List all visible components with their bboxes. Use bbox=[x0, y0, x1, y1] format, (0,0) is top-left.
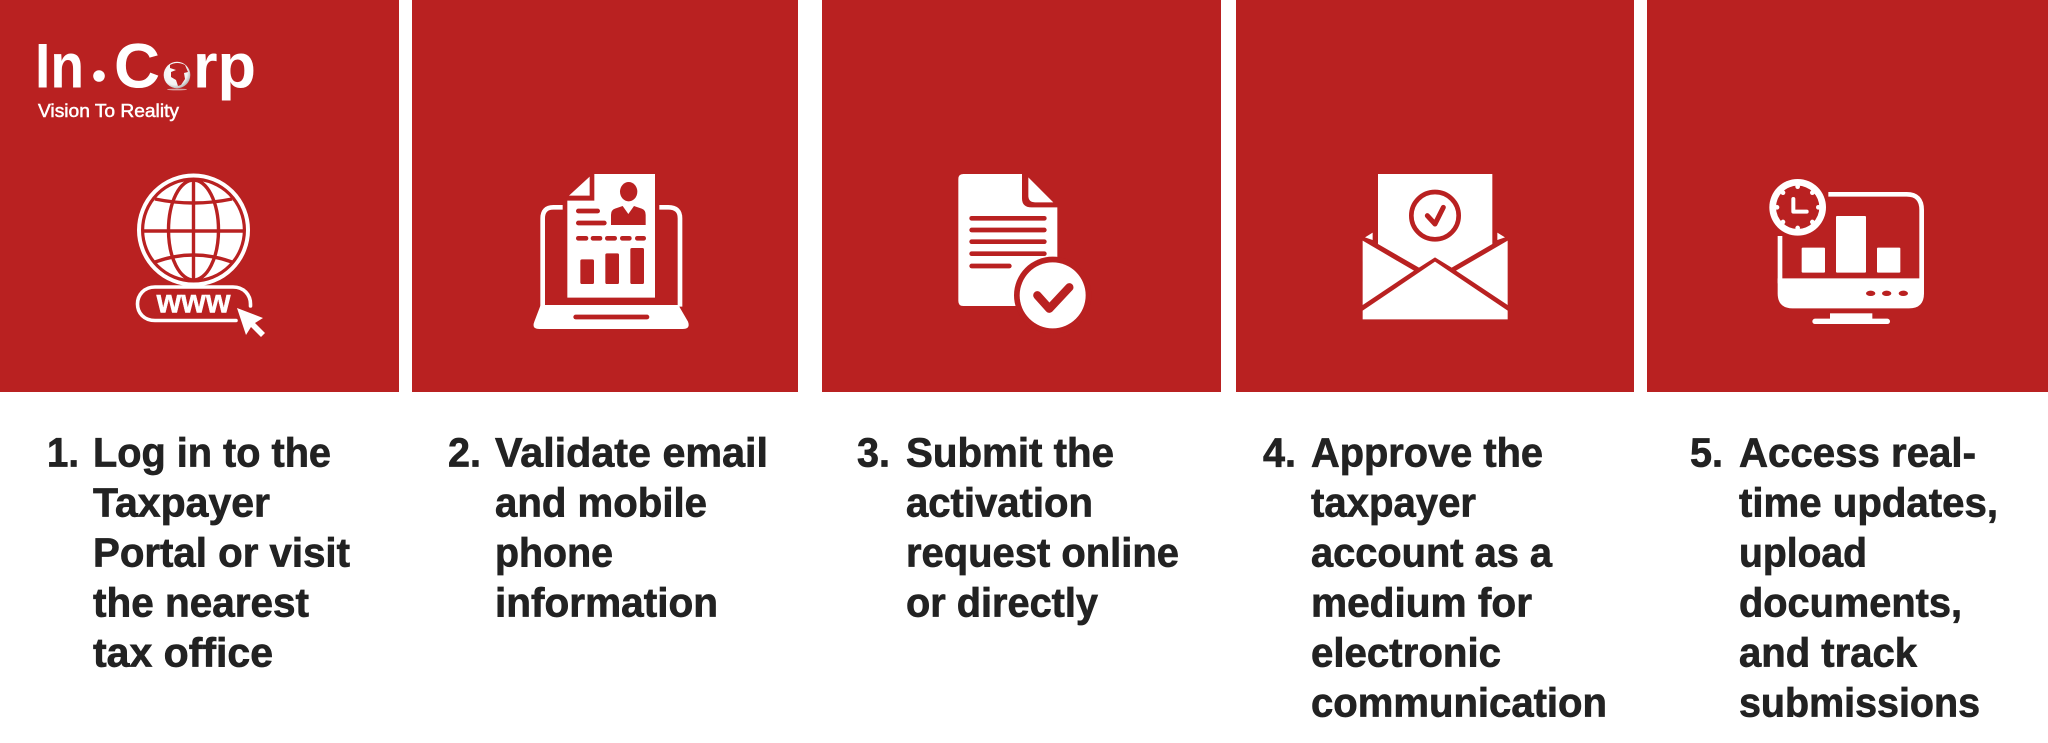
text: step 2: Validate email bbox=[495, 430, 768, 476]
text: step 1: Taxpayer bbox=[93, 480, 270, 526]
text: step 5: 5. bbox=[1690, 430, 1723, 476]
icon: logo globe bbox=[164, 62, 190, 90]
text: step 3: request online bbox=[906, 530, 1179, 576]
logo: InCorp bbox=[35, 32, 256, 121]
panel: step 1 bbox=[0, 0, 399, 392]
text: step 1: Portal or visit bbox=[93, 530, 350, 576]
text: step 4: account as a bbox=[1311, 530, 1553, 576]
text: step 3 bbox=[857, 430, 1179, 626]
text: step 4 bbox=[1263, 430, 1607, 726]
text: step 4: Approve the bbox=[1311, 430, 1543, 476]
text: step 2: 2. bbox=[448, 430, 481, 476]
icon: globe with www bbox=[138, 176, 265, 337]
text: step 3: activation bbox=[906, 480, 1093, 526]
text: step 4: medium for bbox=[1311, 580, 1532, 626]
text: step 4: electronic bbox=[1311, 630, 1501, 676]
text: step 2: and mobile bbox=[495, 480, 707, 526]
text: step 3: 3. bbox=[857, 430, 890, 476]
text: step 4: taxpayer bbox=[1311, 480, 1476, 526]
text: step 5: upload bbox=[1739, 530, 1867, 576]
icon: laptop with document bbox=[534, 174, 689, 329]
text: step 5: documents, bbox=[1739, 580, 1962, 626]
panel: step 5 bbox=[1647, 0, 2048, 392]
icon: globe with www: www bbox=[156, 282, 231, 320]
panel: step 3 bbox=[822, 0, 1221, 392]
icon: document with check bbox=[958, 174, 1091, 334]
logo: InCorp: Vision To Reality bbox=[38, 101, 179, 121]
text: step 4: communication bbox=[1311, 680, 1607, 726]
logo: InCorp: rp bbox=[193, 32, 256, 102]
text: step 5: and track bbox=[1739, 630, 1917, 676]
text: step 2: phone bbox=[495, 530, 613, 576]
text: step 4: 4. bbox=[1263, 430, 1296, 476]
panel: step 2 bbox=[412, 0, 798, 392]
text: step 3: Submit the bbox=[906, 430, 1114, 476]
logo: InCorp: In bbox=[35, 32, 84, 102]
text: step 5 bbox=[1690, 430, 1998, 726]
text: step 1 bbox=[47, 430, 350, 676]
text: step 2: information bbox=[495, 580, 718, 626]
icon: envelope with check letter bbox=[1363, 174, 1508, 319]
text: step 5: Access real- bbox=[1739, 430, 1976, 476]
text: step 3: or directly bbox=[906, 580, 1098, 626]
text: step 5: time updates, bbox=[1739, 480, 1998, 526]
logo: InCorp: C bbox=[114, 32, 160, 102]
text: step 2 bbox=[448, 430, 768, 626]
text: step 1: the nearest bbox=[93, 580, 309, 626]
text: step 1: Log in to the bbox=[93, 430, 331, 476]
icon: monitor with clock bbox=[1769, 179, 1924, 324]
text: step 1: tax office bbox=[93, 630, 273, 676]
panel: step 4 bbox=[1236, 0, 1634, 392]
icon: cursor bbox=[237, 308, 265, 337]
text: step 1: 1. bbox=[47, 430, 79, 476]
text: step 5: submissions bbox=[1739, 680, 1980, 726]
